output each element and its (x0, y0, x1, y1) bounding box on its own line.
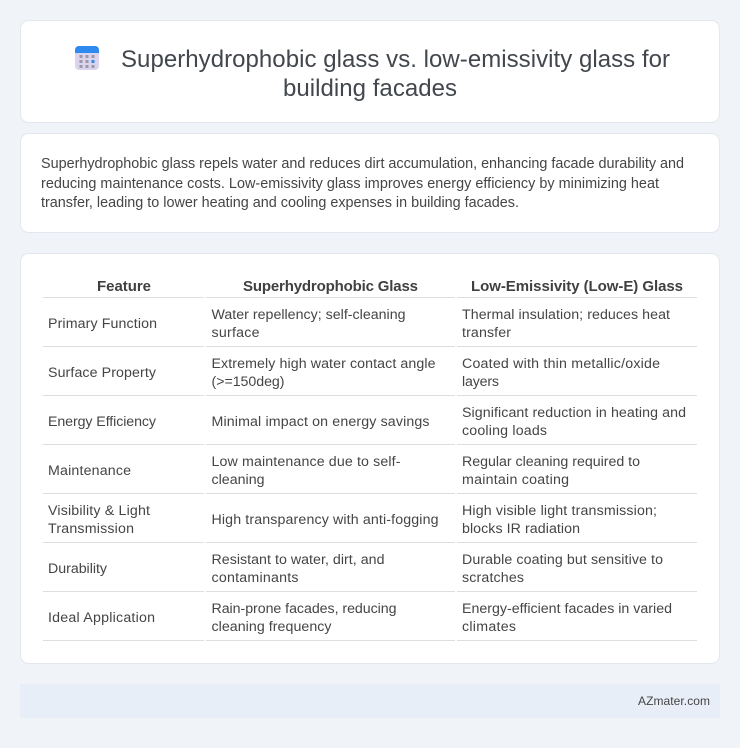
row: durability: contaminants (212, 570, 298, 586)
row: energy efficiency (43, 405, 697, 445)
row: visibility and light transmission (43, 503, 697, 543)
row: ideal application: cleaning frequency (212, 619, 332, 635)
icon: calendar (75, 46, 99, 70)
row: durability (43, 552, 697, 592)
row: ideal application (43, 601, 697, 641)
row: primary function: surface (212, 325, 260, 341)
row: maintenance: Maintenance (48, 463, 131, 479)
row: surface property: Surface Property (48, 365, 157, 381)
panel: comparison table (20, 254, 720, 664)
row: maintenance: cleaning (212, 472, 264, 488)
footer: AZmater.com (638, 694, 710, 708)
row: ideal application: Rain-prone facades, reducing (212, 601, 396, 617)
panel: intro text: Superhydrophobic glass repels water and reduces dirt accumulation, enhancing facade durability and (41, 156, 684, 172)
row: energy efficiency: cooling loads (462, 423, 547, 439)
row: durability: scratches (462, 570, 524, 586)
row: surface property: Extremely high water contact angle (212, 356, 436, 372)
table header: Feature (97, 278, 151, 295)
panel: intro text: transfer, leading to lower heating and cooling expenses in building facades. (41, 195, 519, 211)
table header: Superhydrophobic Glass (243, 278, 418, 295)
row: maintenance (43, 454, 697, 494)
row: primary function (43, 307, 697, 347)
row: visibility and light transmission: High visible light transmission; (462, 503, 657, 519)
row: visibility and light transmission: Visibility & Light (48, 503, 150, 519)
row: durability: Durability (48, 561, 108, 577)
title: Superhydrophobic glass vs. low-emissivity glass for (121, 46, 670, 73)
panel: title card (20, 20, 720, 122)
row: primary function: Primary Function (48, 316, 157, 332)
row: maintenance: Regular cleaning required to (462, 454, 640, 470)
row: visibility and light transmission: blocks IR radiation (462, 521, 580, 537)
row: primary function: Thermal insulation; reduces heat (462, 307, 670, 323)
row: energy efficiency: Significant reduction in heating and (462, 405, 686, 421)
row: surface property: (>=150deg) (212, 374, 284, 390)
row: ideal application: Energy-efficient facades in varied (462, 601, 672, 617)
row: surface property (43, 356, 697, 396)
row: surface property: Coated with thin metallic/oxide (462, 356, 660, 372)
table header (43, 278, 697, 298)
row: visibility and light transmission: High transparency with anti-fogging (212, 512, 438, 528)
row: maintenance: Low maintenance due to self- (212, 454, 401, 470)
row: durability: Durable coating but sensitive to (462, 552, 663, 568)
row: durability: Resistant to water, dirt, and (212, 552, 384, 568)
title: building facades (283, 75, 457, 102)
row: visibility and light transmission: Transmission (48, 521, 134, 537)
panel: intro text: reducing maintenance costs. Low-emissivity glass improves energy efficiency by minimizing heat (41, 176, 659, 192)
row: energy efficiency: Energy Efficiency (48, 414, 157, 430)
panel: intro text (20, 134, 720, 232)
table header: Low-Emissivity (Low-E) Glass (471, 278, 683, 295)
title (121, 46, 670, 102)
footer (20, 684, 720, 718)
row: primary function: Water repellency; self-cleaning (212, 307, 406, 323)
row: energy efficiency: Minimal impact on energy savings (212, 414, 430, 430)
row: maintenance: maintain coating (462, 472, 569, 488)
row: ideal application: Ideal Application (48, 610, 155, 626)
row: surface property: layers (462, 374, 499, 390)
row: primary function: transfer (462, 325, 511, 341)
row: ideal application: climates (462, 619, 516, 635)
